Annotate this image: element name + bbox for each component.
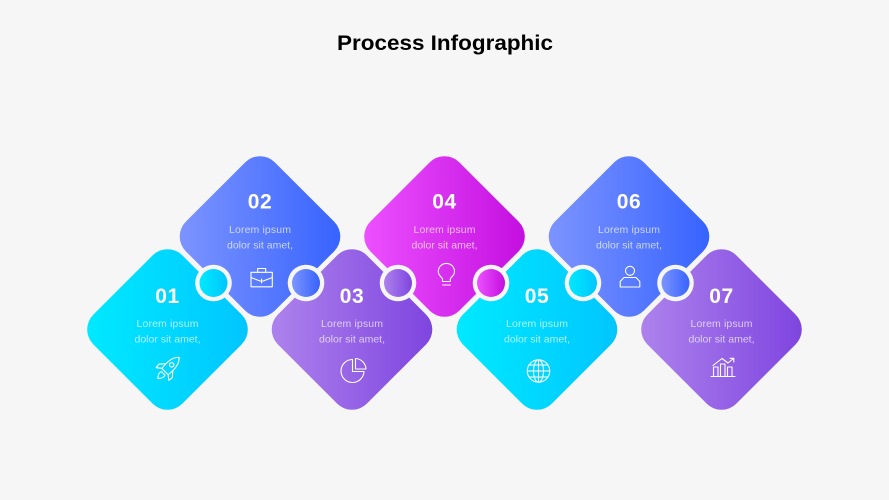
step 06 card: Lorem ipsum bbox=[598, 224, 660, 236]
step 02 card bbox=[180, 156, 340, 317]
icon: person bbox=[620, 266, 640, 287]
step 01 card: 01 bbox=[155, 285, 180, 308]
step 01 card bbox=[87, 249, 248, 410]
connector 6 bbox=[657, 265, 694, 301]
step 04 card bbox=[364, 156, 525, 317]
step 05 card: dolor sit amet, bbox=[504, 333, 570, 345]
step 05 card bbox=[457, 249, 617, 410]
step 01 card: Lorem ipsum bbox=[136, 318, 199, 330]
step 02 card: 02 bbox=[248, 190, 272, 214]
step 06 card: 06 bbox=[617, 190, 641, 214]
step 06 card: dolor sit amet, bbox=[596, 239, 662, 251]
step 07 card: Lorem ipsum bbox=[690, 318, 753, 330]
step 05 card: Lorem ipsum bbox=[506, 318, 568, 330]
icon: globe bbox=[527, 360, 550, 382]
connector 4 bbox=[473, 265, 509, 301]
icon: light bulb bbox=[438, 263, 454, 285]
step 03 card bbox=[272, 249, 432, 410]
step 02 card: Lorem ipsum bbox=[229, 224, 291, 236]
step 04 card: 04 bbox=[432, 190, 457, 214]
step 01 card: dolor sit amet, bbox=[134, 333, 200, 345]
step 03 card: dolor sit amet, bbox=[319, 333, 385, 345]
step 06 card bbox=[549, 156, 709, 317]
connector 2 bbox=[288, 265, 324, 301]
step 02 card: dolor sit amet, bbox=[227, 239, 293, 251]
icon: rising bar chart bbox=[711, 358, 735, 376]
connector 3 bbox=[380, 265, 416, 301]
step 07 card bbox=[641, 249, 802, 410]
icon: rocket bbox=[151, 351, 186, 385]
title: Process Infographic bbox=[337, 32, 553, 55]
connector 1 bbox=[195, 265, 232, 301]
icon: briefcase bbox=[251, 268, 272, 287]
connector 5 bbox=[565, 265, 601, 301]
step 05 card: 05 bbox=[525, 285, 549, 308]
step 04 card: Lorem ipsum bbox=[414, 224, 476, 236]
icon: pie chart bbox=[341, 358, 366, 382]
step 03 card: Lorem ipsum bbox=[321, 318, 383, 330]
step 07 card: 07 bbox=[709, 285, 734, 308]
step 07 card: dolor sit amet, bbox=[688, 333, 754, 345]
step 04 card: dolor sit amet, bbox=[412, 239, 478, 251]
step 03 card: 03 bbox=[340, 285, 364, 308]
